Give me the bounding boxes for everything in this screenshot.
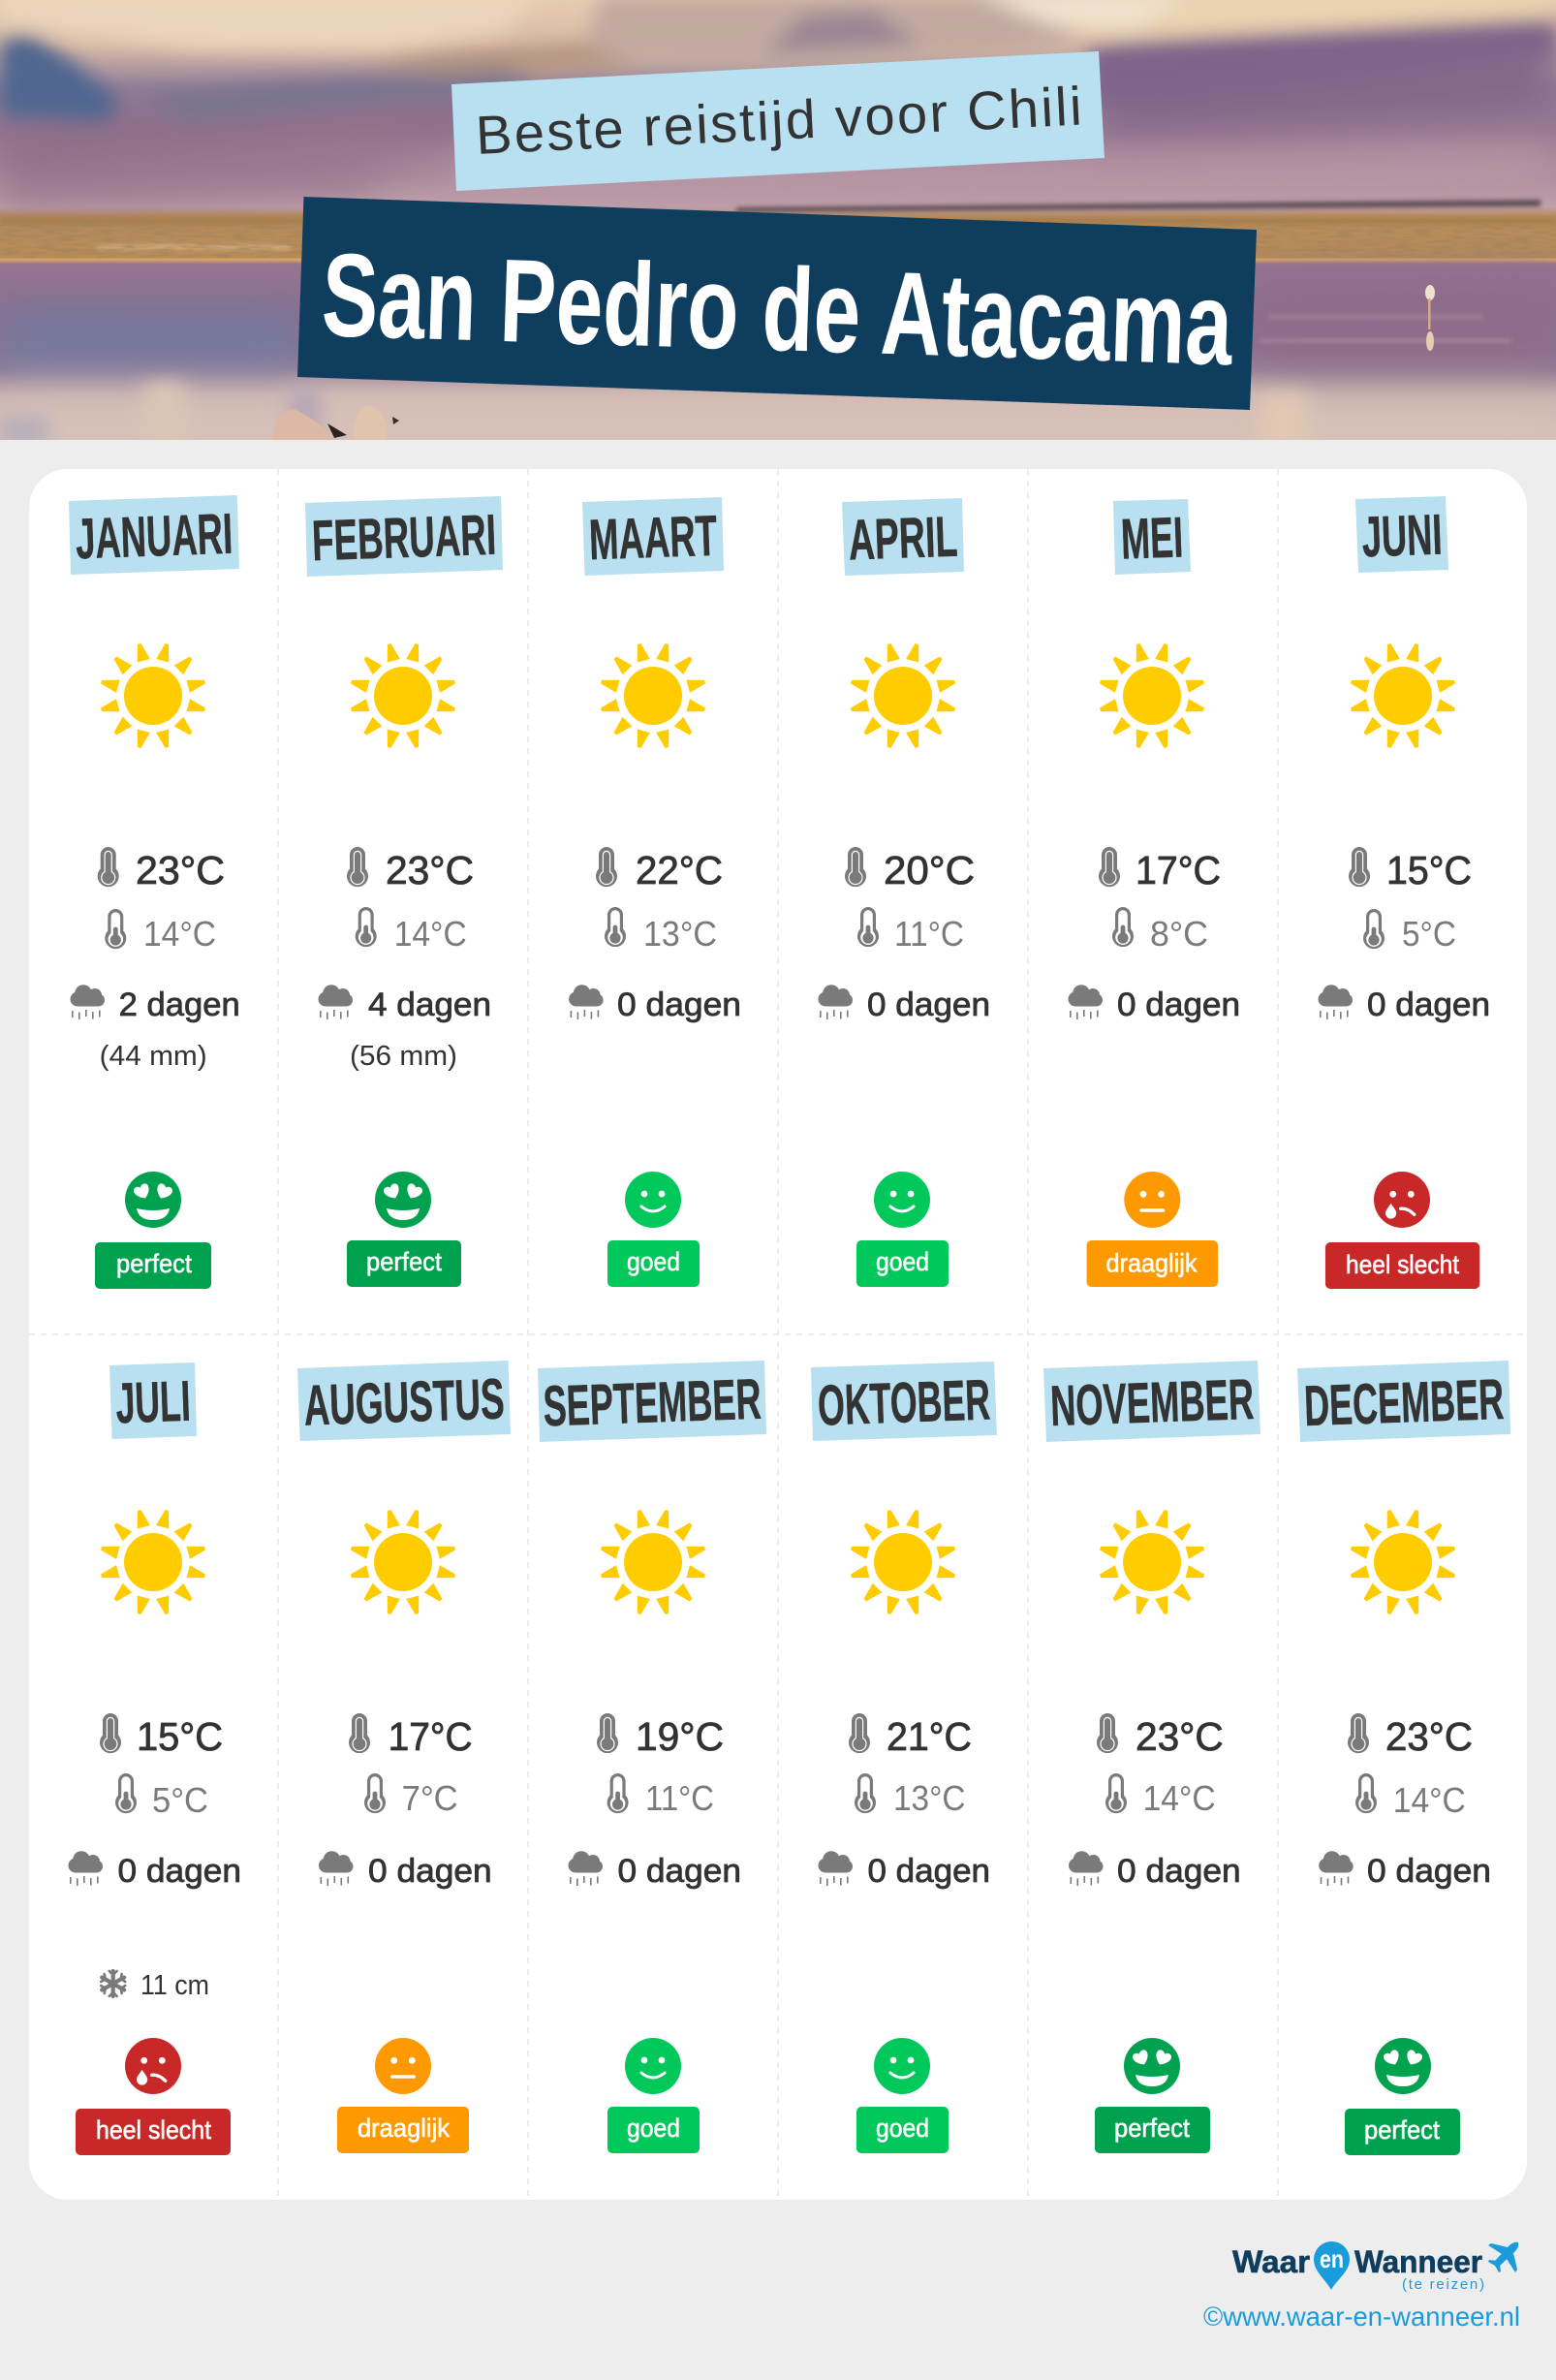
rain days	[818, 985, 990, 1023]
banner: beste reistijd voor chili: Beste reistijd voor Chili	[475, 75, 1083, 166]
icon: sun	[850, 642, 956, 749]
precipitation: (56 mm)	[350, 1041, 457, 1072]
icon: perfect face	[125, 1172, 181, 1228]
panel: juni	[1318, 496, 1490, 1289]
rain days: 0 dagen	[1367, 1853, 1491, 1890]
month heading	[1113, 499, 1191, 575]
rain days	[569, 985, 741, 1023]
month heading	[842, 498, 964, 576]
rating badge	[1087, 1240, 1218, 1287]
low temperature	[857, 907, 964, 954]
rain days: 0 dagen	[368, 1853, 492, 1890]
rain days	[319, 1851, 492, 1890]
icon: sun	[1099, 1509, 1205, 1615]
low temperature	[1355, 1773, 1466, 1820]
rating badge: goed	[627, 1247, 680, 1276]
low temperature	[1363, 909, 1456, 954]
high temperature: 23°C	[136, 848, 225, 892]
month heading	[305, 496, 503, 577]
high temperature: 15°C	[137, 1714, 223, 1759]
icon: sun	[1350, 642, 1456, 749]
icon: goed face	[625, 2038, 681, 2094]
icon: sun	[1350, 1509, 1456, 1615]
panel: month table card	[29, 469, 1527, 2200]
high temperature: 23°C	[386, 848, 474, 892]
logo: waar en wanneer: Waar	[1232, 2244, 1310, 2279]
icon: sun	[850, 1509, 956, 1615]
rain days	[318, 985, 491, 1023]
rain days: 0 dagen	[867, 986, 990, 1023]
panel: maart	[569, 497, 741, 1287]
high temperature	[596, 847, 723, 892]
month heading	[69, 495, 239, 575]
month heading	[109, 1362, 197, 1439]
low temperature: 5°C	[1402, 914, 1456, 954]
rating badge	[76, 2109, 231, 2155]
high temperature	[849, 1713, 972, 1759]
high temperature: 23°C	[1136, 1714, 1224, 1759]
month heading	[297, 1361, 511, 1441]
month heading: APRIL	[848, 505, 958, 572]
rating badge: perfect	[116, 1249, 192, 1278]
low temperature: 14°C	[1393, 1780, 1466, 1820]
low temperature: 5°C	[152, 1780, 208, 1820]
month heading	[582, 497, 724, 576]
icon: map pin: en	[1320, 2244, 1344, 2273]
flamingos foreground	[272, 406, 399, 440]
low temperature	[605, 907, 717, 954]
logo: waar en wanneer: Wanneer	[1354, 2244, 1482, 2279]
high temperature: 15°C	[1386, 848, 1472, 892]
rating badge	[607, 2107, 700, 2153]
low temperature: 14°C	[143, 914, 216, 954]
rain days: 0 dagen	[618, 1853, 741, 1890]
high temperature: 17°C	[1136, 848, 1221, 892]
icon: draaglijk face	[1124, 1172, 1180, 1228]
panel: april	[818, 498, 990, 1287]
icon: goed face	[874, 1172, 930, 1228]
month heading	[1355, 496, 1448, 573]
high temperature: 17°C	[389, 1714, 473, 1759]
rain days	[568, 1851, 741, 1890]
rating badge	[1345, 2109, 1460, 2155]
rating badge: draaglijk	[1106, 1249, 1198, 1278]
icon: sun	[100, 1509, 206, 1615]
rain days: 0 dagen	[118, 1853, 241, 1890]
rain days	[818, 1851, 990, 1890]
high temperature	[347, 847, 474, 892]
high temperature	[98, 847, 225, 892]
rating badge	[1325, 1242, 1479, 1289]
rain days: 0 dagen	[868, 1853, 990, 1890]
high temperature: 19°C	[636, 1714, 724, 1759]
icon: sun	[100, 642, 206, 749]
month heading: NOVEMBER	[1049, 1367, 1255, 1438]
icon: heel slecht face	[125, 2038, 181, 2094]
month heading: JANUARI	[75, 502, 233, 571]
low temperature	[1112, 907, 1208, 954]
rain days	[1068, 985, 1240, 1023]
high temperature: 20°C	[884, 848, 975, 892]
panel: november	[1043, 1361, 1260, 2153]
high temperature	[349, 1713, 473, 1759]
rating badge	[856, 1240, 949, 1287]
rating badge	[1095, 2107, 1210, 2153]
icon: airplane	[1488, 2242, 1518, 2272]
rating badge: perfect	[1364, 2115, 1440, 2145]
icon: sun	[600, 642, 706, 749]
copyright url: ©www.waar-en-wanneer.nl	[1203, 2302, 1520, 2332]
rating badge: goed	[876, 1247, 929, 1276]
month heading: SEPTEMBER	[542, 1367, 762, 1438]
rating badge	[607, 1240, 700, 1287]
rain days	[68, 1851, 241, 1890]
panel: augustus	[297, 1361, 511, 2153]
icon: goed face	[625, 1172, 681, 1228]
rain days: 0 dagen	[1117, 1853, 1241, 1890]
flamingo far right	[1425, 285, 1435, 351]
high temperature	[597, 1713, 724, 1759]
low temperature: 13°C	[643, 914, 717, 954]
low temperature: 8°C	[1150, 914, 1208, 954]
icon: goed face	[874, 2038, 930, 2094]
high temperature	[1348, 1713, 1473, 1759]
rain days: 0 dagen	[1117, 986, 1240, 1023]
icon: perfect face	[1375, 2038, 1431, 2094]
panel: juli	[68, 1362, 241, 2155]
hero photo: salt lake with mountains	[0, 0, 1556, 451]
high temperature	[1349, 847, 1472, 892]
low temperature: 13°C	[893, 1778, 965, 1818]
precipitation: (44 mm)	[100, 1041, 207, 1072]
low temperature: 14°C	[1143, 1778, 1216, 1818]
banner: beste reistijd voor chili	[451, 51, 1105, 191]
high temperature: 22°C	[636, 848, 723, 892]
rain days	[70, 985, 240, 1023]
high temperature	[1099, 847, 1221, 892]
icon: sun	[350, 642, 456, 749]
icon: map pin	[1314, 2241, 1350, 2290]
month heading: MAART	[588, 504, 718, 572]
month heading: MEI	[1120, 505, 1184, 572]
icon: sun	[350, 1509, 456, 1615]
rain days: 0 dagen	[617, 986, 741, 1023]
panel: december	[1297, 1361, 1510, 2155]
snow depth: 11 cm	[140, 1970, 209, 2001]
icon: sun	[600, 1509, 706, 1615]
rating badge	[95, 1242, 211, 1289]
rain days	[1069, 1851, 1241, 1890]
low temperature	[1105, 1773, 1216, 1818]
rain days: 4 dagen	[368, 986, 491, 1023]
panel: mei	[1068, 499, 1240, 1287]
rating badge	[347, 1240, 461, 1287]
rating badge: goed	[627, 2114, 680, 2143]
rating badge: perfect	[1114, 2114, 1190, 2143]
month heading	[538, 1361, 766, 1442]
panel: september	[538, 1361, 766, 2153]
title: san pedro de atacama	[297, 197, 1257, 410]
rain days: 2 dagen	[119, 986, 240, 1023]
high temperature	[100, 1713, 223, 1759]
icon: sun	[1099, 642, 1205, 749]
rain days	[1318, 985, 1490, 1023]
high temperature	[845, 847, 975, 892]
rating badge: heel slecht	[1346, 1250, 1459, 1279]
panel: januari	[69, 495, 240, 1289]
month heading	[811, 1362, 997, 1441]
panel: februari	[305, 496, 503, 1287]
rain days: 0 dagen	[1367, 986, 1490, 1023]
rating badge	[337, 2107, 469, 2153]
rating badge: draaglijk	[358, 2114, 450, 2143]
low temperature	[607, 1773, 714, 1818]
snow depth	[101, 1970, 209, 2001]
low temperature	[115, 1773, 208, 1820]
low temperature	[105, 909, 216, 954]
month heading: FEBRUARI	[311, 503, 497, 573]
high temperature: 23°C	[1385, 1714, 1473, 1759]
low temperature	[356, 907, 467, 954]
panel: oktober	[811, 1362, 997, 2153]
month heading: OKTOBER	[817, 1367, 991, 1438]
icon: perfect face	[1124, 2038, 1180, 2094]
rain days	[1319, 1851, 1491, 1890]
rating badge: perfect	[366, 1247, 442, 1276]
rating badge: heel slecht	[96, 2115, 211, 2145]
month heading: JULI	[114, 1369, 192, 1435]
low temperature	[364, 1773, 458, 1818]
low temperature: 11°C	[645, 1778, 714, 1818]
icon: snowflake	[101, 1971, 125, 1996]
low temperature: 14°C	[394, 914, 467, 954]
high temperature: 21°C	[887, 1714, 972, 1759]
icon: draaglijk face	[375, 2038, 431, 2094]
month heading: JUNI	[1361, 503, 1443, 569]
low temperature: 11°C	[894, 914, 964, 954]
low temperature	[855, 1773, 965, 1818]
logo: waar en wanneer: (te reizen)	[1402, 2276, 1484, 2293]
rating badge: goed	[876, 2114, 929, 2143]
month heading	[1043, 1361, 1260, 1442]
high temperature	[1097, 1713, 1224, 1759]
icon: perfect face	[375, 1172, 431, 1228]
month heading: AUGUSTUS	[302, 1366, 506, 1438]
low temperature: 7°C	[402, 1778, 458, 1818]
logo: waar en wanneer	[1232, 2241, 1518, 2293]
icon: heel slecht face	[1374, 1172, 1430, 1228]
rating badge	[856, 2107, 949, 2153]
